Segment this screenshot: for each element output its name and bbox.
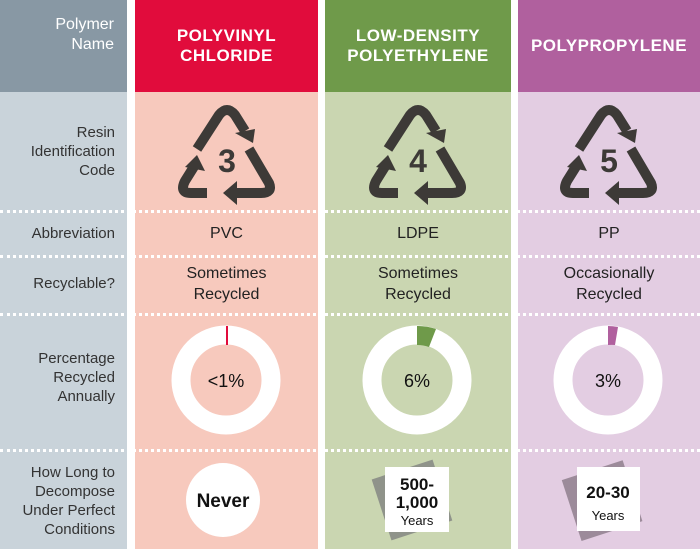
recyclable PP: Occasionally [564,265,654,282]
header: PP [518,0,700,92]
recyclable LDPE: Recycled [385,286,451,303]
label: resin code: Code [79,162,115,179]
icon: recycle 4 [374,110,461,205]
abbreviation PVC: PVC [210,225,243,242]
recyclable LDPE: Sometimes [378,265,458,282]
label: decompose: How Long to [31,464,115,481]
donut: PP [563,326,653,425]
label: decompose [22,464,115,538]
label: percentage: Recycled [53,369,115,386]
panel: PP [518,0,700,549]
header: PVC [135,0,318,92]
header: LDPE: LOW-DENSITY [356,26,480,45]
header: polymer name label: Polymer [55,16,114,33]
abbreviation LDPE: LDPE [397,225,439,242]
recyclable PVC: Sometimes [186,265,267,282]
icon: recycle 3 [183,110,270,205]
donut: PP: 3% [595,371,621,391]
label: decompose: Under Perfect [22,502,115,519]
header: LDPE: POLYETHYLENE [347,46,489,65]
PP decompose box [562,460,642,541]
label: decompose: Decompose [35,483,115,500]
header: PP: POLYPROPYLENE [531,36,687,55]
label: resin code: Identification [31,143,115,160]
donut: PVC: <1% [208,371,244,391]
label: resin code: Resin [77,124,115,141]
label: recyclable: Recyclable? [33,275,115,292]
never circle: Never [197,491,250,512]
recyclable PVC: Recycled [194,286,259,303]
header: LDPE [325,0,511,92]
PP decompose box: 20-30 [586,483,630,502]
LDPE decompose box: 1,000 [396,493,438,512]
icon: recycle 3: 3 [218,143,236,179]
header: PVC: CHLORIDE [180,46,273,65]
panel: PVC [135,0,318,549]
header: polymer name label: Name [71,36,114,53]
recyclable PP: Recycled [576,286,642,303]
panel: LDPE [325,0,511,549]
label: abbreviation: Abbreviation [32,225,115,242]
label: decompose: Conditions [44,521,115,538]
donut: PVC [181,326,271,425]
donut: LDPE: 6% [404,371,430,391]
PP decompose box: Years [592,508,625,523]
LDPE decompose box: 500- [400,475,434,494]
recyclable PVC [186,265,267,303]
header: polymer name label [55,16,114,53]
label: percentage [38,350,115,405]
label: percentage: Percentage [38,350,115,367]
left column [0,0,127,549]
donut: LDPE [372,326,462,425]
never circle [186,463,260,537]
recyclable LDPE [378,265,458,303]
abbreviation PP: PP [598,225,620,242]
label: resin code [31,124,115,179]
label: percentage: Annually [57,388,115,405]
icon: recycle 5: 5 [600,143,618,179]
header: PVC: POLYVINYL [177,26,276,45]
LDPE decompose box [372,460,452,540]
icon: recycle 4: 4 [409,143,427,179]
recyclable PP [564,265,654,303]
icon: recycle 5 [565,110,652,205]
LDPE decompose box: Years [401,513,434,528]
